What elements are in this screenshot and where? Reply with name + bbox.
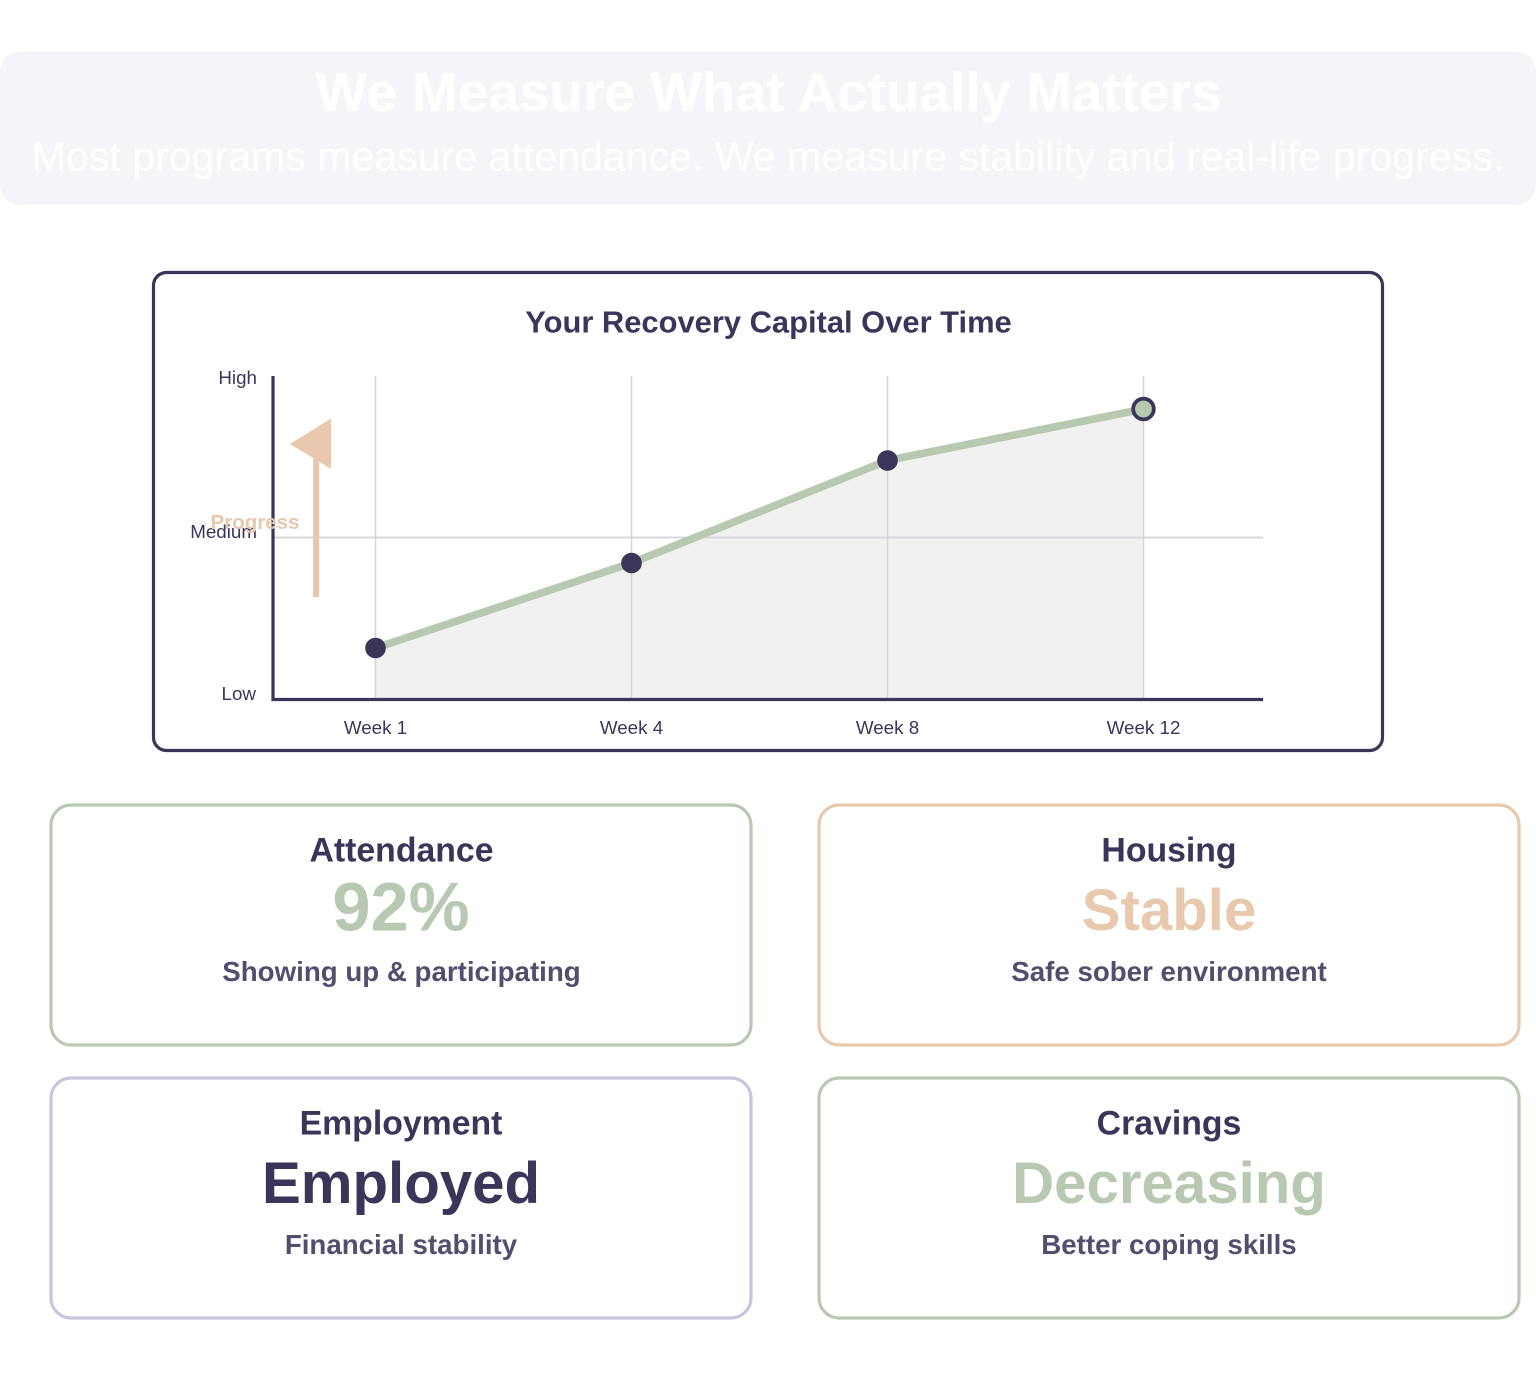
area under the line — [376, 409, 1144, 699]
y axis labels: Low — [222, 683, 256, 704]
chart heading: Your Recovery Capital Over Time — [525, 304, 1012, 340]
progress label: Progress — [211, 511, 299, 534]
x axis labels: Week 8 — [856, 717, 919, 738]
housing label: Housing — [1101, 832, 1237, 870]
panel: cravings — [819, 1078, 1519, 1318]
housing value: Stable — [1082, 878, 1256, 943]
cravings value: Decreasing — [1012, 1151, 1326, 1216]
employment value: Employed — [262, 1151, 540, 1216]
panel: employment — [51, 1078, 751, 1318]
panel: attendance — [51, 805, 751, 1045]
panel: recovery capital chart — [154, 272, 1382, 750]
panel: housing — [819, 805, 1519, 1045]
x axis labels — [344, 717, 1180, 738]
attendance value: 92% — [332, 868, 470, 945]
y axis labels: Medium — [190, 521, 257, 542]
title: We Measure What Actually Matters — [316, 61, 1221, 123]
cravings description: Better coping skills — [1041, 1229, 1297, 1260]
subtitle: Most programs measure attendance. We measure stability and real-life progress. — [32, 134, 1504, 180]
employment description: Financial stability — [285, 1229, 518, 1260]
employment label: Employment — [300, 1104, 502, 1142]
y axis labels — [190, 367, 257, 704]
cravings label: Cravings — [1097, 1104, 1241, 1142]
housing description: Safe sober environment — [1011, 956, 1327, 987]
line chart — [190, 367, 1263, 738]
y axis labels: High — [218, 367, 257, 388]
x axis labels: Week 4 — [600, 717, 663, 738]
arrow: progress — [290, 418, 331, 597]
data points — [365, 399, 1154, 658]
x axis labels: Week 12 — [1107, 717, 1180, 738]
x axis labels: Week 1 — [344, 717, 407, 738]
axes — [273, 376, 1263, 700]
attendance description: Showing up & participating — [222, 956, 581, 987]
attendance label: Attendance — [309, 832, 494, 870]
header banner — [0, 52, 1536, 205]
progress line — [376, 409, 1144, 648]
